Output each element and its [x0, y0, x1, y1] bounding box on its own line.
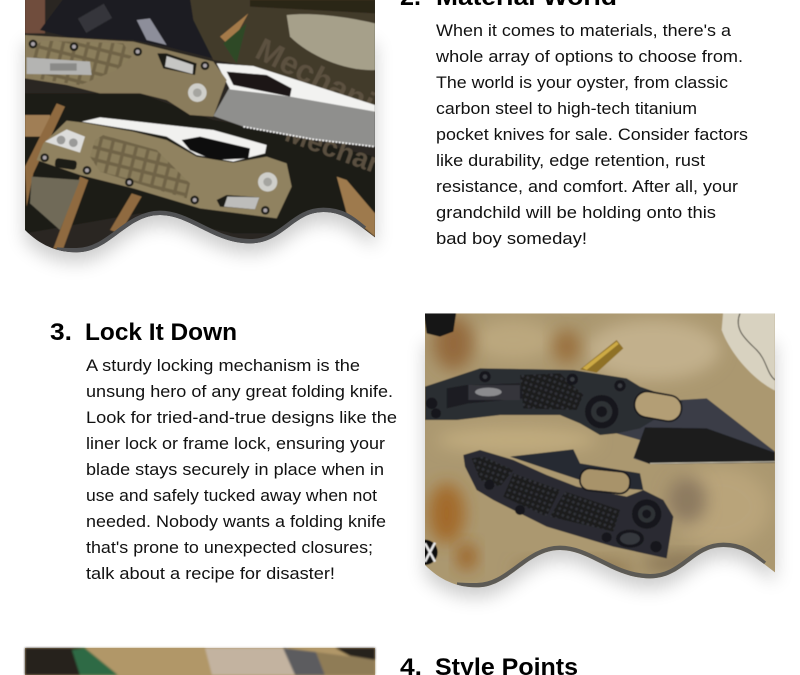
text block: lock it down: liner lock or frame lock, ensuring your	[86, 434, 385, 453]
photo: tan folding knives on camo	[20, 0, 412, 262]
knife 2	[510, 449, 643, 490]
text block: material world: pocket knives for sale. Consider factors	[436, 125, 748, 144]
pouch and dark object	[722, 310, 775, 391]
photo: tan folding knives on camo: Mechanix	[281, 117, 412, 189]
text block: lock it down: Look for tried-and-true designs like the	[86, 408, 397, 427]
heading: 3. Lock It Down: 3.	[50, 319, 72, 346]
text block: material world: grandchild will be holding onto this	[436, 203, 716, 222]
text block: lock it down: talk about a recipe for disaster!	[86, 564, 335, 583]
text block: material world: carbon steel to high-tech titanium	[436, 99, 697, 118]
text block: material world: like durability, edge retention, rust	[436, 151, 705, 170]
text block: material world: resistance, and comfort. After all, your	[436, 177, 738, 196]
heading: 3. Lock It Down: Lock It Down	[85, 319, 237, 346]
text block: lock it down: unsung hero of any great folding knife.	[86, 382, 393, 401]
photo: black folding knives on stained leather	[412, 310, 780, 597]
text block: lock it down: blade stays securely in place when in	[86, 460, 384, 479]
bullet	[580, 340, 623, 373]
text block: material world	[435, 21, 748, 248]
text block: lock it down: use and safely tucked away when not	[86, 486, 377, 505]
text block: lock it down	[86, 356, 397, 583]
text block: material world: whole array of options to choose from.	[435, 47, 743, 66]
knife 1	[617, 398, 775, 464]
corner badge	[425, 539, 438, 566]
text block: lock it down: that's prone to unexpected closures;	[86, 538, 373, 557]
text block: lock it down: A sturdy locking mechanism is the	[86, 356, 360, 375]
text block: material world: When it comes to materials, there's a	[436, 21, 732, 40]
photo: tan folding knives on camo: Mechanix	[250, 31, 397, 129]
knife 1	[213, 88, 375, 148]
text block: lock it down: needed. Nobody wants a folding knife	[86, 512, 386, 531]
text block: material world: bad boy someday!	[436, 229, 587, 248]
photo: third knife image (cropped at page bottom)	[25, 648, 375, 675]
knife 2	[82, 117, 267, 162]
text block: material world: The world is your oyster, from classic	[436, 73, 729, 92]
